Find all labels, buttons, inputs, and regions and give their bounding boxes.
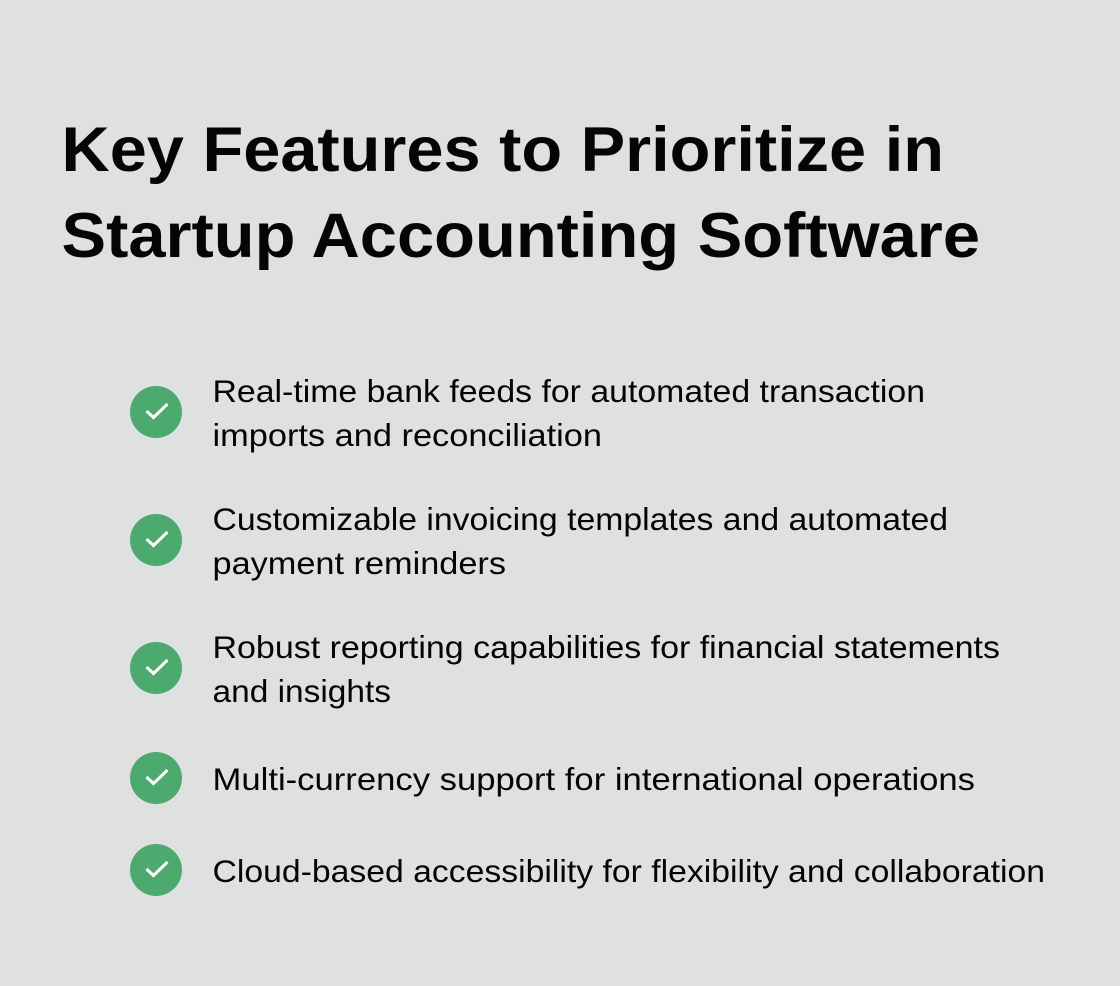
text: real-time bank feeds: [212, 373, 925, 453]
text: cloud-based accessibility: Cloud-based accessibility for flexibility and collaboration: [212, 853, 1045, 889]
text: multi-currency support: Multi-currency support for international operations: [212, 761, 975, 797]
list item: customizable invoicing: [130, 501, 948, 581]
list item: cloud-based accessibility: [130, 844, 1045, 896]
icon: green check circle: [130, 642, 182, 694]
feature list: [130, 373, 1045, 896]
list item: real-time bank feeds: [130, 373, 925, 453]
list item: multi-currency support: [130, 752, 975, 804]
title: [62, 115, 980, 271]
icon: green check circle: [130, 514, 182, 566]
list item: robust reporting: [130, 629, 1000, 709]
icon: green check circle: [130, 844, 182, 896]
icon: green check circle: [130, 386, 182, 438]
text: robust reporting: and insights: [212, 673, 391, 709]
text: real-time bank feeds: Real-time bank feeds for automated transaction: [212, 373, 925, 409]
text: real-time bank feeds: imports and reconciliation: [212, 417, 602, 453]
text: customizable invoicing: Customizable invoicing templates and automated: [212, 501, 948, 537]
text: robust reporting: Robust reporting capabilities for financial statements: [212, 629, 1000, 665]
title: Startup Accounting Software: [62, 201, 980, 271]
text: customizable invoicing: payment reminders: [212, 545, 506, 581]
icon: green check circle: [130, 752, 182, 804]
text: robust reporting: [212, 629, 1000, 709]
title: Key Features to Prioritize in: [62, 115, 944, 185]
text: customizable invoicing: [212, 501, 948, 581]
